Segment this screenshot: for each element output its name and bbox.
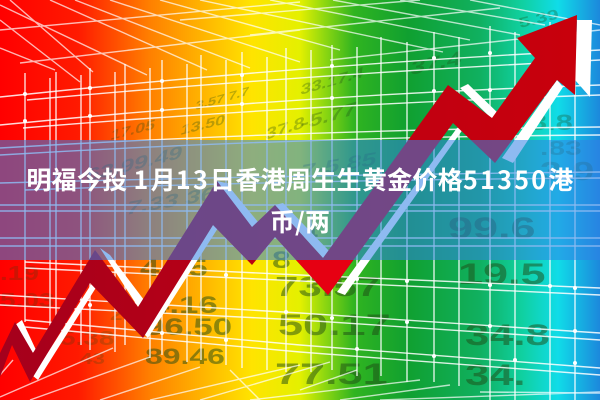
faded numbers: 37.8: [264, 113, 306, 144]
faded numbers: 4.55: [140, 255, 208, 282]
faded numbers: 50.17: [278, 308, 391, 342]
faded numbers: -5.77: [299, 97, 358, 134]
faded numbers: 73.57: [275, 271, 380, 302]
faded numbers: 63.99.49: [84, 142, 184, 186]
faded numbers: 37.4: [409, 47, 463, 80]
faded numbers: 5.03: [0, 290, 55, 312]
faded numbers: 7.33 36: [124, 183, 218, 220]
faded numbers: 33.17.4: [299, 63, 365, 98]
faded numbers: 3.9: [540, 157, 594, 186]
faded numbers: .19: [0, 263, 39, 285]
translucent title band: [0, 140, 600, 260]
title: [26, 161, 574, 239]
faded numbers: 4.16: [150, 292, 218, 319]
faded numbers: 34.8: [465, 318, 550, 351]
faded numbers: 43: [80, 350, 105, 368]
faded numbers: 3.8: [530, 110, 573, 135]
faded numbers: 17.05: [109, 117, 157, 143]
faded numbers: 89.46: [145, 344, 225, 369]
faded numbers: 3.57 7.7: [195, 83, 251, 113]
grid nodes: [23, 51, 577, 365]
faded numbers: 7.4: [275, 220, 318, 245]
faded numbers: 7-5.85: [299, 148, 378, 182]
faded numbers: 13.50: [179, 112, 227, 138]
title: 明福今投 1月13日香港周生生黄金价格51350港: [26, 161, 574, 197]
faded numbers: 19.5: [458, 257, 546, 291]
faded numbers: 5.38: [60, 328, 115, 350]
faded numbers: 34.: [465, 358, 525, 391]
faded numbers: 77.51: [275, 357, 388, 391]
faded numbers: 5.39: [517, 6, 560, 31]
faded numbers: 99.6: [448, 211, 536, 245]
faded numbers: 96.50: [145, 314, 232, 341]
faded numbers: .83: [540, 138, 582, 160]
arrow lower tip brightening: [296, 260, 353, 295]
title: 币/两: [270, 203, 330, 239]
faded numbers: 8: [272, 247, 291, 274]
faded numbers: 21: [110, 306, 135, 324]
